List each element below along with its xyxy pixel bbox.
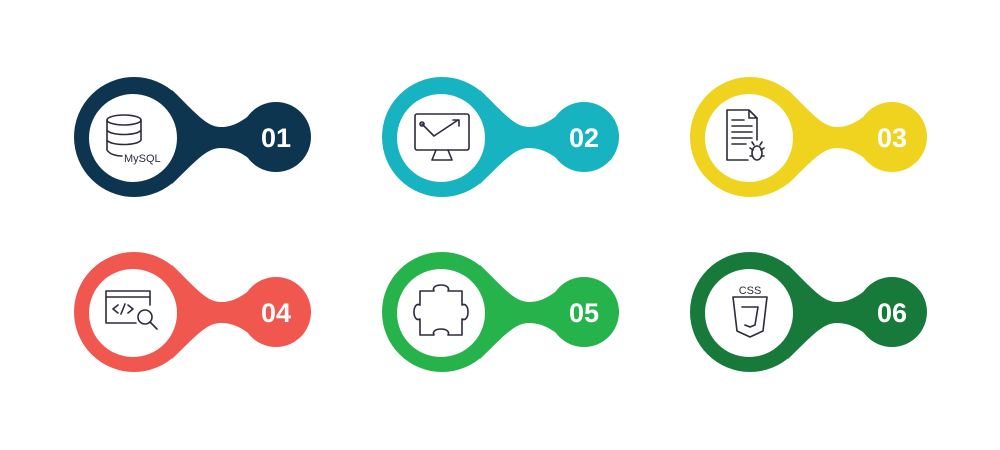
number 02: 02 [569,123,599,153]
number 06: 06 [877,298,907,328]
icon: mysql database [107,115,141,156]
step 03: document bug [690,77,927,197]
step 06: css [690,252,927,372]
number 04: 04 [261,298,291,328]
step 01: MySQL [74,77,311,197]
icon: monitor chart [415,114,469,160]
step 06: css: CSS [739,285,761,297]
icon: puzzle piece [414,285,468,335]
icon: code window with magnifier [106,291,157,329]
step 01: MySQL: MySQL [124,153,161,165]
step 02: monitor [382,77,619,197]
icon: css shield [733,297,767,337]
number 01: 01 [261,123,291,153]
icon: document with bug [727,110,764,160]
step 04: code search [74,252,311,372]
number 03: 03 [877,123,907,153]
number 05: 05 [569,298,599,328]
step 05: puzzle [382,252,619,372]
